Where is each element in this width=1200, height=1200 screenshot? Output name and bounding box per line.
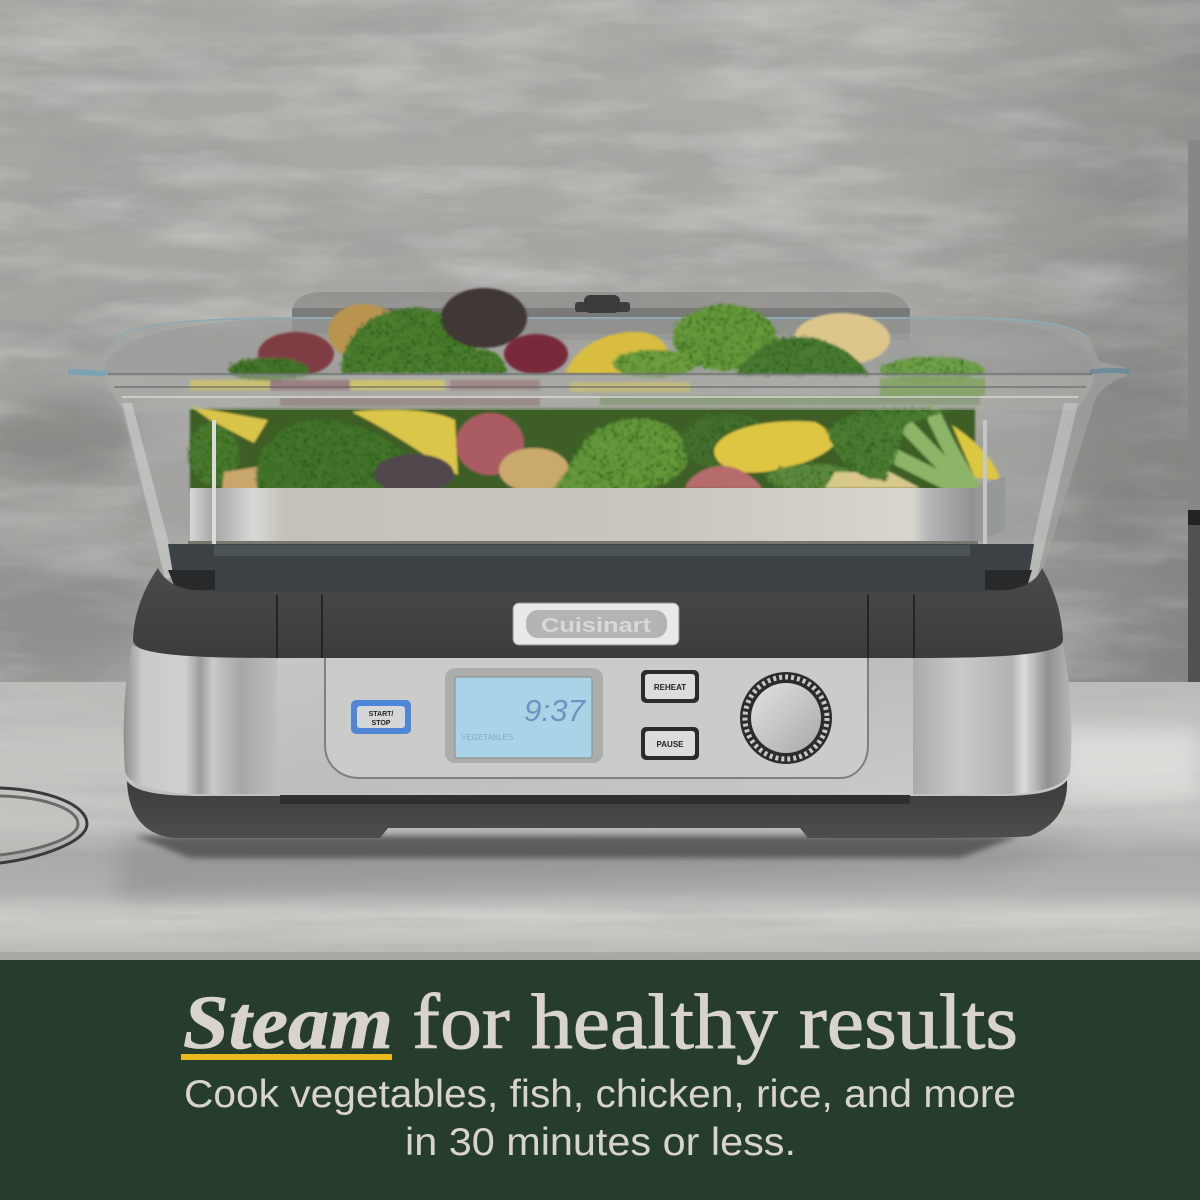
REHEAT button	[641, 670, 699, 703]
background: concrete wall	[0, 0, 1200, 682]
food: dark greens behind	[190, 408, 975, 490]
food: wedge of tofu or squash, left	[222, 465, 268, 490]
food: broccoli, dark crown	[735, 335, 868, 374]
food: gold potato slice, lower right	[825, 472, 920, 488]
food: broccoli, large upper	[340, 306, 505, 372]
glass bowl back wall	[68, 318, 1130, 580]
food: broccoli, large lower left	[255, 418, 414, 490]
steamer appliance	[68, 288, 1130, 838]
food: background broccoli, lower right	[765, 462, 855, 490]
food: broccoli, upper right	[671, 303, 775, 369]
yellow underline	[181, 1054, 392, 1060]
LCD display: 9:37	[524, 693, 587, 728]
subheading line 2: in 30 minutes or less.	[405, 1121, 796, 1164]
food: yellow wedge, far right	[952, 425, 1000, 480]
LCD display: VEGETABLES	[461, 733, 513, 742]
stainless steel left section	[124, 645, 277, 794]
food: broccoli, far right	[878, 355, 982, 381]
upper layer of vegetables	[227, 288, 982, 381]
subheading	[184, 1073, 1016, 1164]
heading emphasis: Steam: Steam	[183, 981, 393, 1065]
START/STOP button: STOP	[372, 720, 391, 727]
food: dark broccoli behind squash	[680, 412, 770, 468]
subheading line 1: Cook vegetables, fish, chicken, rice, and more	[184, 1073, 1016, 1116]
PAUSE button: PAUSE	[657, 740, 684, 749]
food: gold potato, upper right	[794, 313, 890, 365]
heading remainder: for healthy results	[412, 978, 1018, 1065]
food: purple potato	[441, 288, 527, 348]
dark lower base	[127, 780, 1067, 838]
REHEAT button: REHEAT	[654, 683, 686, 692]
Cuisinart logo badge: Cuisinart	[541, 615, 651, 637]
food: broccoli, upper centre	[611, 348, 695, 376]
food: red potato, centre	[504, 334, 568, 374]
food: yellow squash slice, lower right	[714, 421, 835, 473]
food: red potato, upper left	[258, 332, 334, 376]
Cuisinart logo badge	[513, 603, 679, 645]
food: gold potato, lower	[499, 448, 569, 492]
heading	[183, 978, 1018, 1065]
appliance edge at right of wall	[1188, 140, 1200, 697]
food: purple potato, lower	[374, 454, 454, 494]
food: broccoli left edge	[187, 420, 237, 484]
green caption band	[0, 960, 1200, 1200]
lower layer of vegetables	[187, 406, 1000, 494]
stainless steel food tray	[188, 476, 1005, 544]
glass lid behind food	[292, 292, 910, 340]
food: gold potato, upper left	[328, 304, 400, 360]
stainless steel right section	[913, 645, 1071, 794]
food: red potato, lower	[456, 413, 524, 475]
glass rim band with reflections	[105, 374, 1095, 410]
food: red potato, lower right	[685, 466, 762, 489]
stainless steel front panel	[277, 658, 913, 794]
food: broccoli, small left	[227, 356, 307, 380]
food: broccoli stems, lower right	[882, 412, 972, 486]
water reservoir	[168, 544, 1034, 592]
control dial	[740, 672, 832, 764]
marble countertop	[0, 682, 1200, 960]
START/STOP button	[351, 700, 411, 734]
PAUSE button	[641, 727, 699, 760]
food: squash slice, centre	[565, 332, 672, 374]
glass lid on left of counter	[0, 788, 87, 863]
food: broccoli, lower centre	[550, 417, 686, 492]
food: yellow squash wedge, lower	[352, 410, 458, 475]
dark upper housing	[133, 568, 1063, 658]
glass bowl side walls and supports	[122, 403, 1078, 582]
LCD display	[445, 668, 603, 763]
food: yellow wedge, left	[190, 406, 268, 443]
food: broccoli floret, lower right	[825, 406, 950, 478]
START/STOP button: START/	[369, 711, 393, 718]
